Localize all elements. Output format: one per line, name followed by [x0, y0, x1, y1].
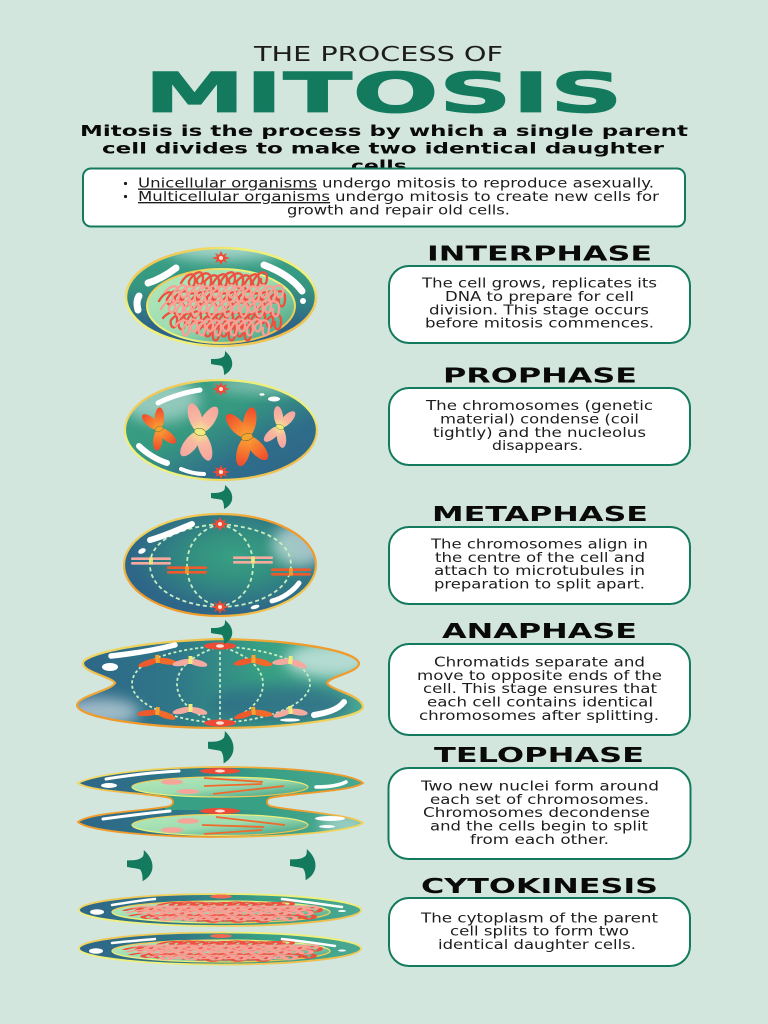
- arrow: anaphase to telophase: [208, 731, 233, 763]
- cell: cytokinesis lower daughter: [79, 932, 361, 964]
- panel: anaphase description: move to opposite ends of the: [417, 668, 662, 684]
- panel: uses of mitosis: Unicellular organisms: [138, 176, 317, 192]
- panel: anaphase description: Chromatids separate and: [434, 654, 645, 670]
- panel: metaphase description: The chromosomes align in: [430, 536, 648, 552]
- panel: prophase description: tightly) and the nucleolus: [433, 425, 646, 441]
- panel: cytokinesis description: cell splits to form two: [450, 924, 629, 940]
- panel: prophase description: material) condense (coil: [440, 412, 639, 428]
- panel: uses of mitosis: undergo mitosis to reproduce asexually.: [322, 176, 654, 192]
- panel: metaphase description: preparation to split apart.: [434, 576, 645, 592]
- cell: prophase: [120, 377, 317, 480]
- panel: cytokinesis description: The cytoplasm of the parent: [420, 910, 658, 926]
- intro definition text: Mitosis is the process by which a single parent: [80, 122, 688, 140]
- panel: telophase description: each set of chromosomes.: [430, 792, 649, 808]
- panel: interphase description: before mitosis commences.: [425, 316, 654, 332]
- panel: anaphase description: [389, 644, 690, 735]
- panel: anaphase description: each cell contains identical: [427, 694, 653, 710]
- panel: telophase description: Chromosomes decondense: [423, 805, 650, 821]
- panel: prophase description: disappears.: [492, 438, 583, 454]
- panel: cytokinesis description: [389, 898, 690, 966]
- cell: interphase: [126, 236, 316, 346]
- panel: uses of mitosis: Multicellular organisms: [138, 189, 330, 205]
- arrow: prophase to metaphase: [211, 485, 232, 509]
- panel: metaphase description: attach to microtubules in: [434, 563, 645, 579]
- cell: telophase: [78, 767, 370, 837]
- panel: telophase description: Two new nuclei form around: [420, 778, 659, 794]
- arrow: metaphase to anaphase: [211, 620, 232, 644]
- panel: uses of mitosis: undergo mitosis to create new cells for: [335, 189, 660, 205]
- panel: interphase description: [389, 266, 690, 343]
- panel: uses of mitosis: [83, 168, 685, 226]
- panel: metaphase description: [389, 527, 690, 604]
- cell: anaphase: [60, 639, 375, 728]
- arrow: telophase right daughter: [290, 849, 315, 880]
- arrow: telophase left daughter: [127, 850, 152, 881]
- cell: metaphase: [124, 514, 328, 616]
- intro definition text: cells.: [351, 157, 415, 175]
- heading: interphase: INTERPHASE: [427, 242, 652, 266]
- panel: prophase description: [389, 388, 690, 465]
- arrow: interphase to prophase: [211, 351, 232, 375]
- panel: interphase description: DNA to prepare for cell: [445, 289, 634, 305]
- panel: telophase description: [388, 768, 690, 859]
- heading: cytokinesis: CYTOKINESIS: [421, 874, 658, 898]
- panel: metaphase description: the centre of the cell and: [435, 550, 645, 566]
- panel: telophase description: from each other.: [470, 832, 609, 848]
- panel: cytokinesis description: identical daughter cells.: [438, 937, 636, 953]
- panel: uses of mitosis: growth and repair old cells.: [287, 202, 510, 218]
- heading: anaphase: ANAPHASE: [442, 619, 637, 643]
- intro definition text: [80, 122, 688, 175]
- intro definition text: cell divides to make two identical daughter: [102, 140, 665, 158]
- title: the process of: THE PROCESS OF: [253, 42, 503, 66]
- title: mitosis: MITOSIS: [144, 61, 623, 125]
- heading: telophase: TELOPHASE: [434, 743, 644, 767]
- heading: metaphase: METAPHASE: [432, 502, 648, 526]
- panel: prophase description: The chromosomes (genetic: [425, 398, 653, 414]
- panel: interphase description: The cell grows, replicates its: [421, 276, 657, 292]
- panel: anaphase description: cell. This stage ensures that: [423, 681, 657, 697]
- heading: prophase: PROPHASE: [443, 364, 637, 388]
- panel: anaphase description: chromosomes after splitting.: [419, 708, 659, 724]
- panel: interphase description: division. This stage occurs: [429, 302, 649, 318]
- panel: telophase description: and the cells begin to split: [430, 818, 648, 834]
- cell: cytokinesis upper daughter: [79, 894, 361, 926]
